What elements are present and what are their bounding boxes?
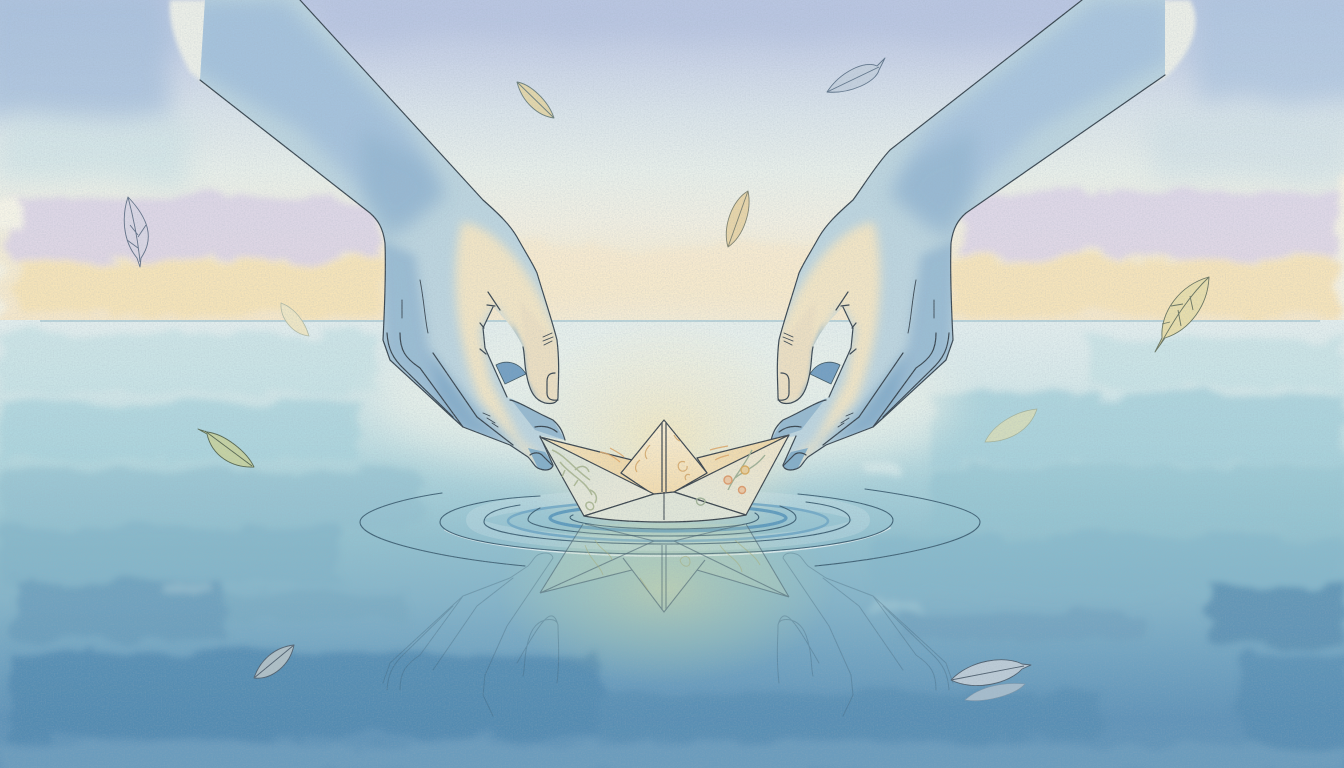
centre crease: [663, 492, 665, 520]
floral pattern right: [696, 450, 765, 505]
pale water around the boat: [375, 320, 955, 480]
ripple lines: [360, 489, 980, 566]
pale halo behind left arm: [170, 0, 215, 92]
left hand and arm: [190, 0, 565, 472]
paper boat: [540, 420, 789, 522]
right hand and arm: [771, 0, 1171, 472]
reflected boat: [540, 524, 789, 612]
left hand washes: [190, 0, 565, 472]
reflection fills: [540, 524, 789, 612]
reflection outline: [540, 524, 789, 612]
floral pattern sail: [600, 435, 729, 480]
sail crease: [662, 423, 666, 492]
leaf: left pale: [281, 303, 309, 336]
leaf: upper right: [827, 58, 885, 92]
leaf: centre tan: [726, 191, 749, 247]
right hand outlines: [771, 0, 1165, 470]
left hand outlines: [200, 0, 565, 470]
bottom centre panel: [584, 492, 746, 522]
centre sail: [621, 420, 707, 495]
reflection of right hand: [777, 553, 953, 716]
floral pattern left: [552, 450, 596, 510]
water washes: [0, 320, 1344, 768]
leaf: lower left: [254, 645, 294, 678]
leaf: lower right small: [965, 684, 1025, 701]
left hand fill: [200, 0, 565, 470]
front right panel: [674, 435, 789, 515]
sky colour bands: [0, 0, 1344, 180]
right hand fill: [771, 0, 1165, 470]
reflected floral marks: [585, 540, 760, 590]
lavender and peach horizon bands: [0, 180, 1344, 320]
leaf: right water green: [985, 409, 1037, 442]
water colour bands: [0, 334, 1344, 768]
reflected hands: [383, 553, 953, 716]
back wing left: [540, 437, 654, 495]
left ring finger behind: [496, 362, 526, 384]
leaf: lower right large: [951, 660, 1031, 686]
glow behind the boat: [515, 320, 815, 560]
leaf: left water green: [198, 429, 254, 467]
ripples: [360, 489, 980, 566]
sky washes: [0, 0, 1344, 322]
reflection glow: [495, 495, 835, 685]
horizon line: [40, 320, 1320, 322]
front left panel: [540, 437, 654, 516]
reflection of left hand: [383, 553, 559, 716]
leaf: far left outline: [124, 197, 148, 267]
leaf: right yellow-green: [1155, 277, 1209, 352]
back wing right: [674, 435, 789, 492]
ripple shading: [445, 496, 890, 556]
pale halo behind right arm: [1120, 0, 1196, 100]
right hand washes: [771, 0, 1171, 472]
right ring finger behind: [810, 362, 840, 384]
leaf: upper centre-left: [517, 82, 554, 118]
